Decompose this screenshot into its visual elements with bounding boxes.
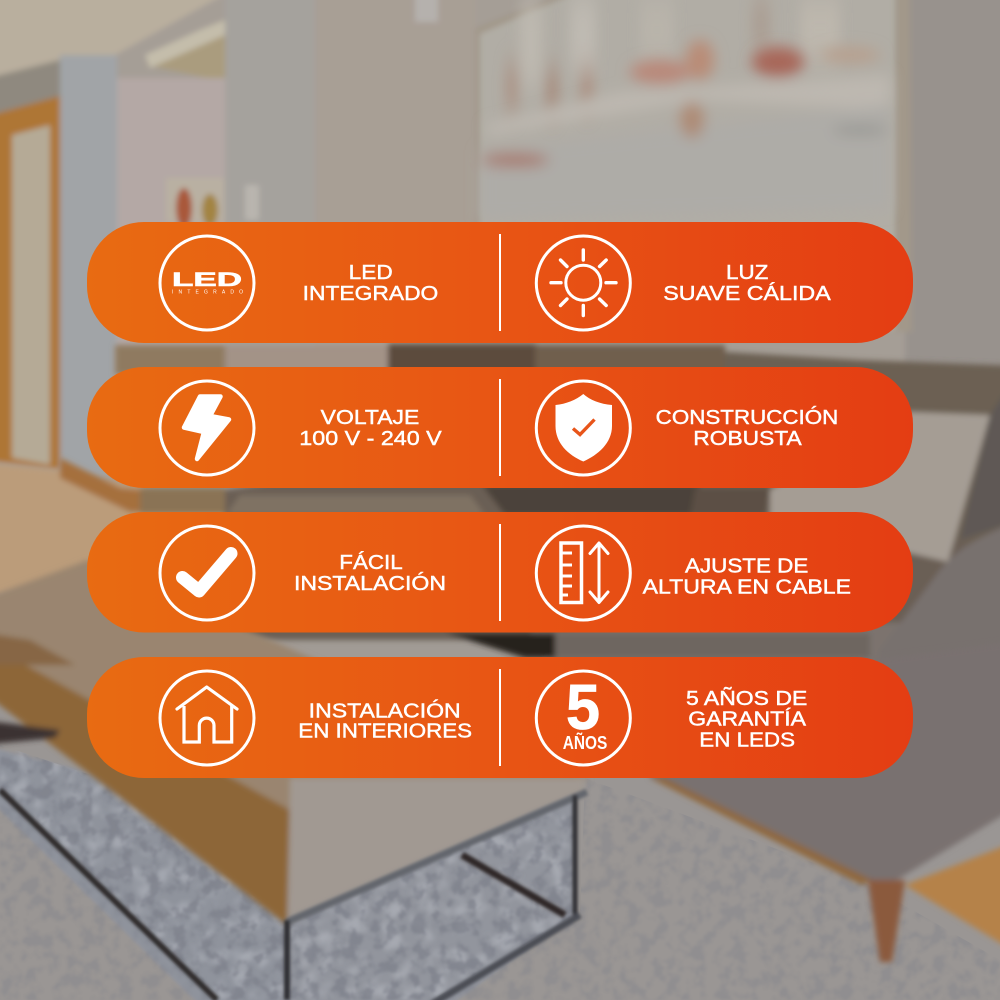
text: ajuste de altura — [643, 555, 851, 598]
text: 5 años de garantía: GARANTÍA — [688, 708, 807, 731]
icon: 5 años — [536, 671, 630, 765]
panel: row 1 orange pill — [87, 222, 913, 343]
text: 5 años de garantía: EN LEDS — [699, 729, 795, 751]
text: fácil instalación: FÁCIL — [339, 551, 403, 574]
text: 5 años de garantía: 5 AÑOS DE — [686, 686, 807, 710]
text: LED integrado: INTEGRADO — [303, 283, 438, 305]
icon: lightning bolt — [160, 381, 254, 475]
text: ajuste de altura: AJUSTE DE — [685, 555, 808, 577]
text: 5 años de garantía — [686, 686, 807, 751]
panel: row 4 orange pill — [87, 657, 913, 778]
coffee table — [0, 560, 590, 925]
text: LED integrado: LED — [349, 262, 393, 284]
text: instalación en interiores — [298, 699, 472, 743]
icon: sun — [536, 236, 630, 330]
rug base — [0, 700, 1000, 1000]
text: fácil instalación: INSTALACIÓN — [294, 572, 446, 595]
icon: shield with check — [536, 381, 630, 475]
text: construcción robusta: CONSTRUCCIÓN — [656, 406, 838, 429]
panel: row 3 orange pill — [87, 512, 913, 632]
icon: LED integrado: INTEGRADO — [172, 290, 243, 296]
text: voltaje: VOLTAJE — [321, 407, 419, 429]
icon: LED integrado — [160, 236, 254, 330]
text: instalación en interiores: EN INTERIORES — [298, 721, 472, 743]
armchair base and floor — [640, 640, 1000, 962]
text: ajuste de altura: ALTURA EN CABLE — [643, 576, 851, 598]
icon: house — [160, 671, 254, 765]
icon: LED integrado: LED — [172, 270, 242, 291]
text: voltaje — [299, 407, 442, 450]
icon: 5 años: 5 — [566, 671, 600, 743]
text: luz suave cálida: LUZ — [726, 262, 768, 284]
text: fácil instalación — [294, 551, 446, 595]
text: luz suave cálida — [663, 262, 831, 305]
icon: ruler and height arrow — [536, 526, 630, 620]
text: luz suave cálida: SUAVE CÁLIDA — [663, 282, 831, 305]
painting streaks — [505, 0, 840, 112]
text: instalación en interiores: INSTALACIÓN — [309, 699, 461, 722]
text: construcción robusta: ROBUSTA — [693, 428, 802, 450]
text: LED integrado — [303, 262, 438, 305]
text: voltaje: 100 V - 240 V — [299, 428, 442, 450]
icon: 5 años: AÑOS — [563, 732, 607, 753]
text: construcción robusta — [656, 406, 838, 450]
icon: check mark — [160, 526, 254, 620]
panel: row 2 orange pill — [87, 367, 913, 488]
